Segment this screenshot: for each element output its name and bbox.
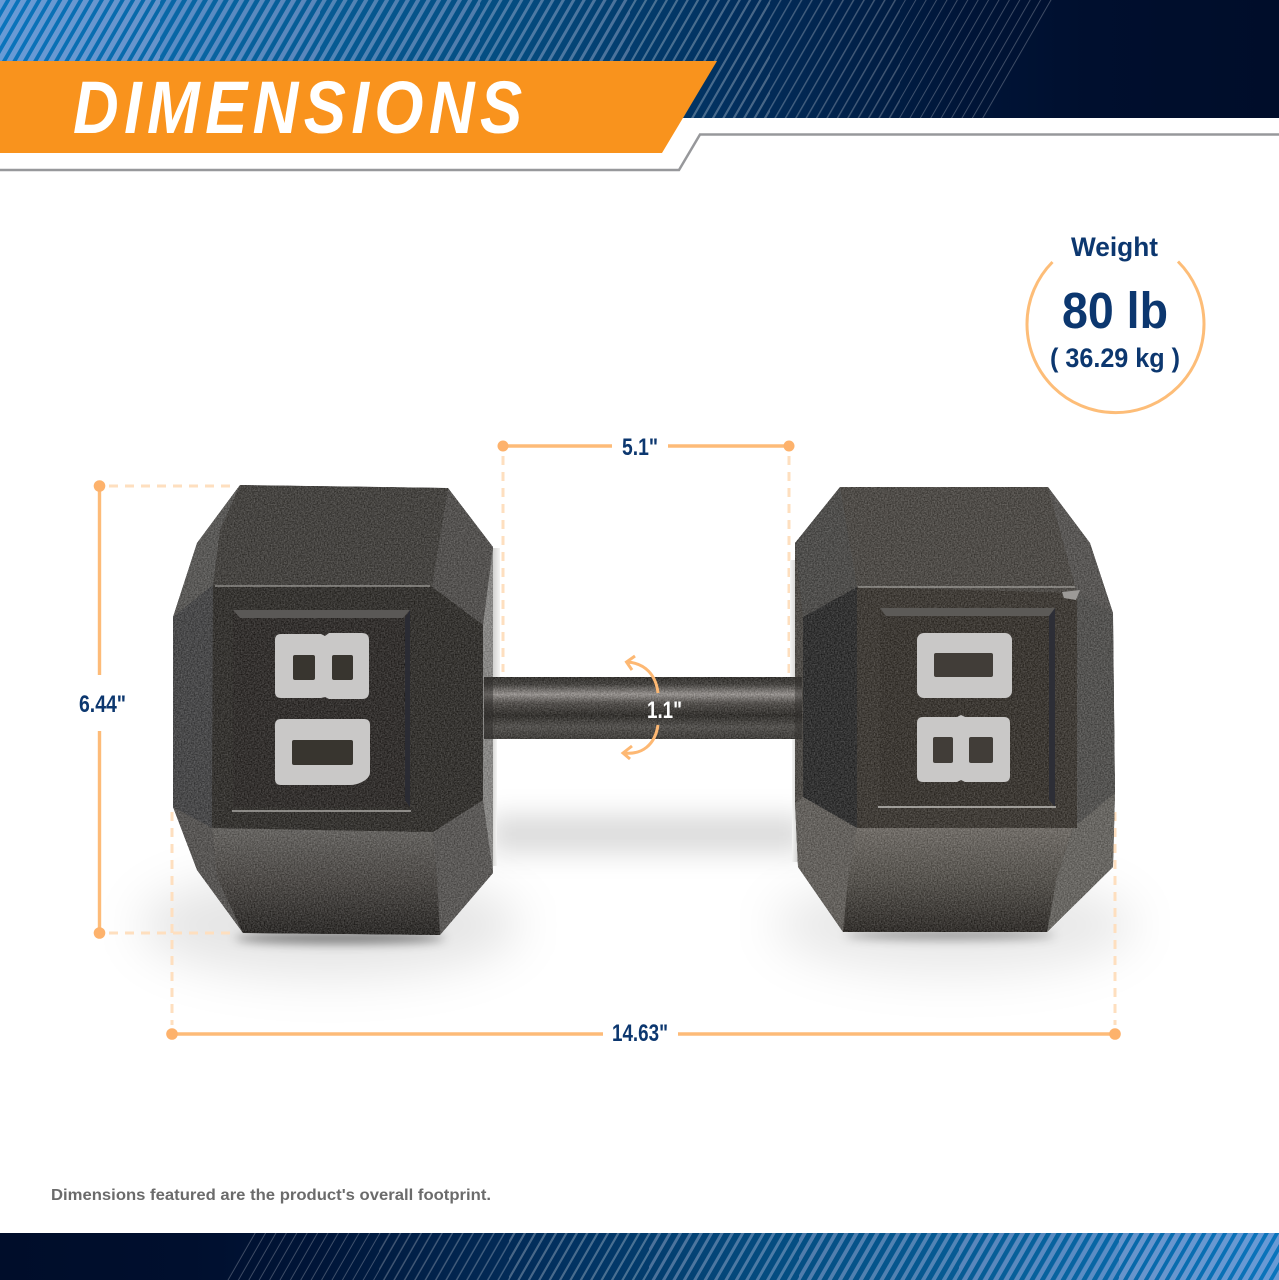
handle — [484, 677, 802, 739]
header outline rule — [0, 134, 1279, 170]
dimension: overall length 14.63 in: 14.63" — [612, 1020, 668, 1047]
weight in kilograms: ( 36.29 kg ) — [1050, 343, 1180, 373]
bottom footer band — [0, 1233, 1279, 1280]
dimension: height 6.44 in: 6.44" — [79, 691, 126, 718]
circular arrow: bottom — [623, 725, 658, 759]
numeral 8 holes — [293, 655, 353, 680]
numeral 8 holes — [933, 737, 993, 763]
weight heading: Weight — [1071, 232, 1158, 262]
numeral 0 hole — [292, 740, 353, 765]
top header band — [0, 0, 1279, 118]
weight in pounds: 80 lb — [1062, 282, 1168, 339]
right bell — [795, 487, 1115, 932]
dashed extension lines — [109, 456, 1115, 1025]
embossed numeral 8 — [275, 633, 369, 699]
left bell — [173, 485, 493, 935]
weight badge — [1027, 232, 1204, 413]
silver reflections beside bells — [488, 548, 802, 866]
embossed numeral 8 — [917, 715, 1010, 782]
orange title banner — [0, 61, 717, 153]
dimension: handle diameter 1.1 in — [623, 656, 682, 759]
dimension: handle length 5.1 in — [498, 434, 794, 461]
dimension: overall length 14.63 in — [166, 1020, 1121, 1047]
numeral 0 hole — [934, 653, 993, 677]
embossed numeral 0 — [917, 633, 1012, 698]
weight ring — [1027, 262, 1204, 413]
title: DIMENSIONS — [73, 66, 528, 149]
dimension: handle length 5.1 in: 5.1" — [622, 434, 658, 461]
circular arrow: top — [626, 656, 658, 693]
floor shadows — [140, 815, 1135, 977]
dimension: height 6.44 in — [79, 480, 126, 939]
diameter value: 1.1" — [647, 697, 682, 724]
embossed numeral 0 — [275, 719, 370, 785]
footnote: Dimensions featured are the product's overall footprint. — [51, 1187, 491, 1204]
dumbbell — [173, 485, 1115, 935]
